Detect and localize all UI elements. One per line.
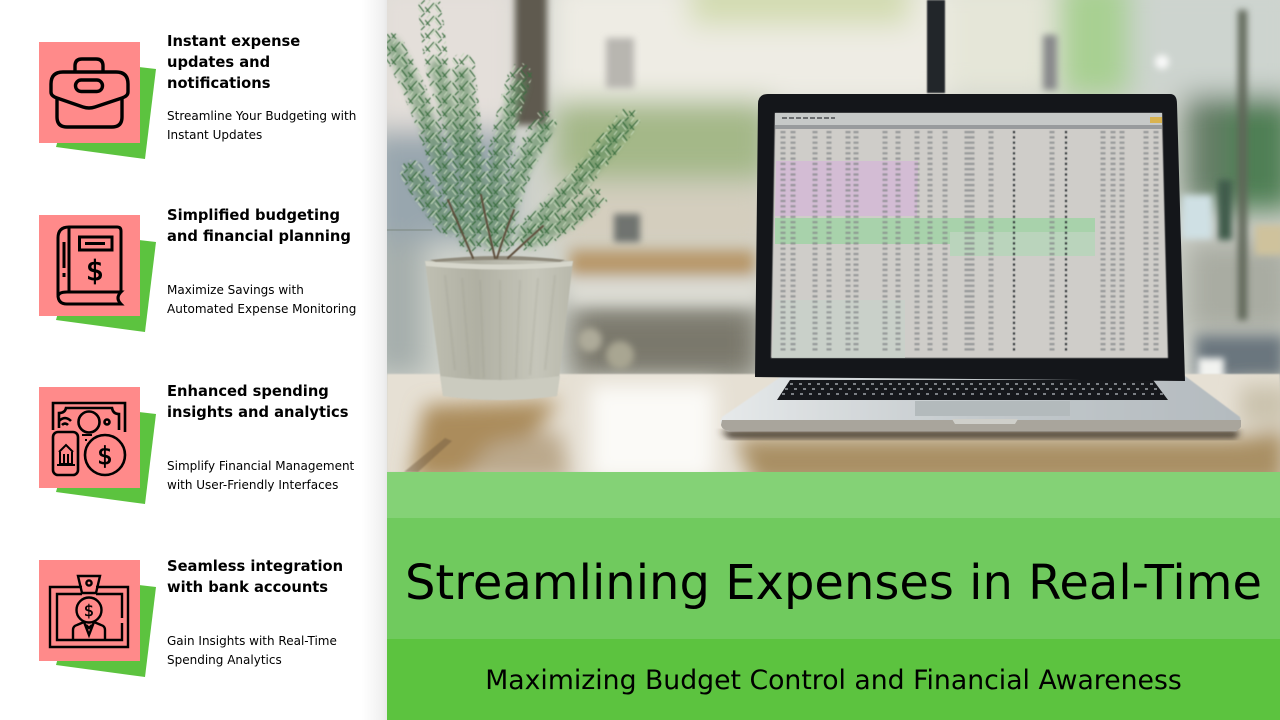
text: item 3 description: with User-Friendly Interfaces xyxy=(167,478,338,492)
panel: title banner xyxy=(387,472,1280,720)
icon: budget book xyxy=(39,215,156,332)
trackpad xyxy=(915,401,1070,416)
wooden table xyxy=(387,374,1280,485)
heading: item 3: insights and analytics xyxy=(167,404,348,421)
text: subtitle: Maximizing Budget Control and Financial Awareness xyxy=(485,665,1182,696)
keyboard xyxy=(777,380,1168,400)
icon: ID badge with dollar head: $ xyxy=(84,601,94,620)
text: item 2 description: Automated Expense Monitoring xyxy=(167,302,356,316)
laptop lid xyxy=(755,94,1185,381)
panel: photo of laptop and potted plant on a table xyxy=(387,0,1280,472)
heading: item 2 xyxy=(167,207,351,245)
text: item 3 description xyxy=(167,459,354,492)
text: item 1 description: Instant Updates xyxy=(167,128,262,142)
text: item 2 description xyxy=(167,283,356,316)
plant pot xyxy=(425,256,573,400)
icon: money, phone and coin: $ xyxy=(97,442,113,470)
band: light green xyxy=(387,472,1280,518)
heading: item 3: Enhanced spending xyxy=(167,383,329,400)
heading: item 1: notifications xyxy=(167,75,270,92)
heading: item 2: Simplified budgeting xyxy=(167,207,340,224)
heading: item 4: with bank accounts xyxy=(167,579,328,596)
panel: left feature list background with soft shadow xyxy=(0,0,387,720)
band: mid green xyxy=(387,518,1280,639)
text: item 4 description: Spending Analytics xyxy=(167,653,282,667)
text: item 1 description xyxy=(167,109,356,142)
icon: money, phone and coin xyxy=(39,387,156,504)
icon: ID badge with dollar head xyxy=(39,560,156,677)
plant xyxy=(387,8,628,258)
heading: item 4 xyxy=(167,558,343,596)
text: item 2 description: Maximize Savings with xyxy=(167,283,304,297)
text: item 4 description xyxy=(167,634,337,667)
heading: item 1: Instant expense xyxy=(167,33,300,50)
text: item 3 description: Simplify Financial Management xyxy=(167,459,354,473)
laptop base xyxy=(721,376,1240,431)
icon: briefcase xyxy=(39,42,156,159)
laptop xyxy=(721,94,1241,431)
icon: budget book: $ xyxy=(86,254,104,287)
heading: item 1 xyxy=(167,33,300,92)
blurred background xyxy=(370,0,1280,472)
heading: item 4: Seamless integration xyxy=(167,558,343,575)
text: item 4 description: Gain Insights with Real-Time xyxy=(167,634,337,648)
heading: item 2: and financial planning xyxy=(167,228,351,245)
heading: title: Streamlining Expenses in Real-Time xyxy=(405,555,1262,611)
heading: item 3 xyxy=(167,383,348,421)
text: item 1 description: Streamline Your Budgeting with xyxy=(167,109,356,123)
spreadsheet screen xyxy=(771,113,1168,358)
heading: item 1: updates and xyxy=(167,54,270,71)
